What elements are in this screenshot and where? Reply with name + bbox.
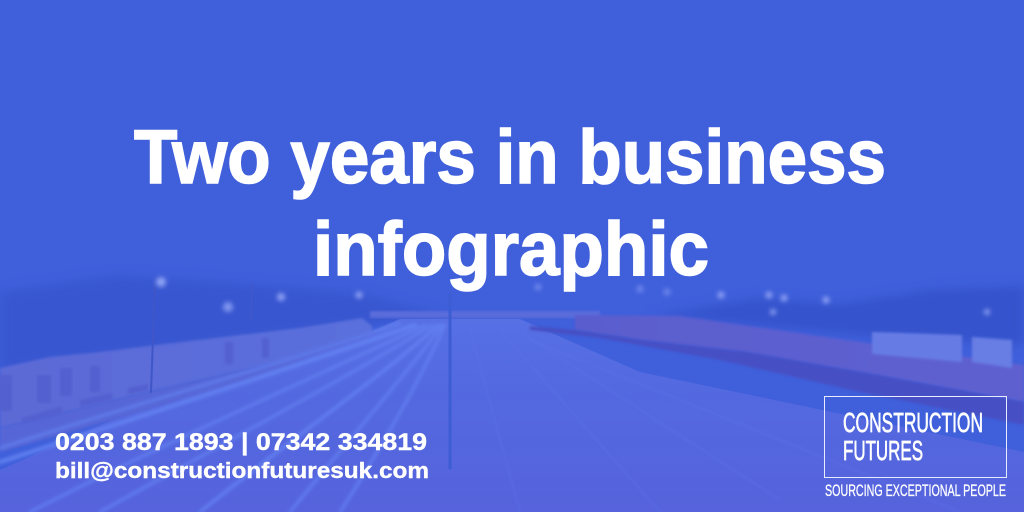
faint lane lines right xyxy=(470,330,960,512)
distant bridge xyxy=(370,311,600,318)
contact details xyxy=(55,429,429,483)
logo: Construction Futures xyxy=(824,396,1006,500)
right buildings xyxy=(872,332,1012,368)
background photo: night motorway xyxy=(0,275,1024,512)
left verge xyxy=(0,332,380,452)
right concrete wall xyxy=(575,315,1024,402)
street lights xyxy=(156,277,990,315)
title: Two years in business xyxy=(134,115,886,200)
left concrete wall xyxy=(0,318,372,428)
left wall panels xyxy=(0,338,269,424)
email address: bill@constructionfuturesuk.com xyxy=(55,458,429,483)
treeline right xyxy=(650,286,1024,345)
phone numbers: 0203 887 1893 | 07342 334819 xyxy=(55,429,427,456)
title xyxy=(134,115,886,292)
light trails xyxy=(0,323,445,512)
logo frame xyxy=(824,396,1006,478)
road surface xyxy=(0,319,1024,512)
lamp posts xyxy=(151,282,450,468)
logo: Construction Futures: FUTURES xyxy=(843,435,923,466)
treeline left xyxy=(0,275,440,372)
right barrier dark strip xyxy=(530,326,1024,425)
title: infographic xyxy=(313,207,709,292)
